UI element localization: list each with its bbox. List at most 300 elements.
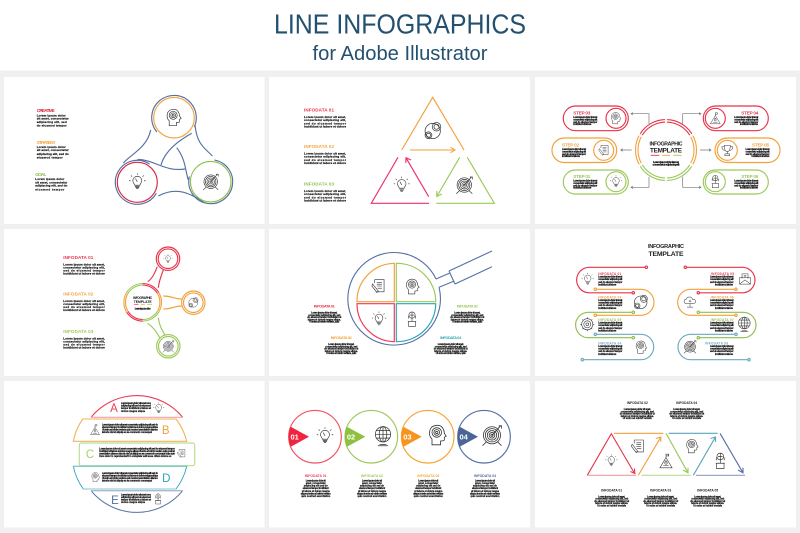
bottom text blocks: INFODATA 01	[601, 488, 622, 492]
slice C	[79, 443, 195, 466]
right text blocks	[705, 272, 734, 356]
left text blocks: Lorem ipsum dolor sit amet	[598, 299, 623, 302]
bottom text blocks: INFODATA 05	[697, 488, 718, 492]
panel: chained triangles	[535, 381, 796, 528]
text: infodata 02: INFODATA 02	[361, 474, 383, 478]
pill: step 02: sed do eiusmod tempor	[562, 153, 586, 156]
circle: green target	[190, 161, 231, 202]
text: infodata 01: ut labore et dolore magna	[302, 490, 330, 493]
text: infodata 02: Lorem ipsum dolor sit	[362, 480, 382, 482]
right text blocks: incididunt ut labore	[715, 353, 734, 356]
pill: step 01: sed do eiusmod tempor	[573, 184, 597, 187]
text block: infodata 04: do eiusmod tempor incididunt ut	[434, 348, 468, 351]
pill: step 04: sed do eiusmod tempor	[734, 121, 758, 124]
right text blocks: Lorem ipsum dolor sit amet	[710, 276, 734, 278]
slice E: adipiscing elit sed do eiusmod	[121, 496, 152, 499]
hub label: INFOGRAPHIC	[133, 296, 153, 300]
right text blocks: INFODATA 05	[711, 272, 734, 276]
top text blocks: INFODATA 04	[676, 401, 697, 405]
pill: step 01: Lorem ipsum dolor sit amet	[573, 180, 598, 182]
text: infodata 04: INFODATA 04	[474, 474, 496, 478]
top text blocks: INFODATA 02	[627, 401, 648, 405]
top text blocks: consectetur adipiscing elit, sed	[621, 410, 654, 413]
text block: infodata 01	[304, 108, 347, 128]
hub label	[133, 296, 153, 310]
text block: infodata 03: do eiusmod tempor incididunt ut	[450, 316, 485, 319]
left text blocks: Lorem ipsum dolor sit amet	[598, 276, 623, 278]
panel: hub and branches	[4, 229, 264, 376]
subtitle: for Adobe Illustrator	[312, 43, 488, 65]
left text blocks: sed do eiusmod tempor	[598, 350, 622, 353]
circle 01	[289, 410, 341, 463]
left text blocks: consectetur adipiscing elit	[598, 324, 623, 327]
pill: step 03	[563, 106, 628, 131]
right teal line	[678, 333, 750, 361]
text block: goal: eiusmod tempor	[35, 187, 65, 191]
text block: strategy: adipiscing elit, sed do	[37, 152, 69, 156]
text: infodata 04: Lorem ipsum dolor sit	[475, 480, 495, 482]
pill: step 03: STEP 03	[573, 110, 591, 116]
top text blocks: do eiusmod tempor incididunt ut	[669, 413, 704, 416]
text: infodata 04	[470, 474, 500, 498]
pill: step 02: STEP 02	[562, 142, 579, 148]
text block: infodata 03	[304, 182, 347, 202]
text: infodata 03: quis nostrud exercitation	[414, 495, 443, 498]
text block: strategy: Lorem ipsum dolor	[37, 145, 67, 149]
top text blocks: Ut enim ad minim veniam	[623, 417, 652, 420]
left red line	[577, 266, 648, 294]
center label: INFOGRAPHIC	[650, 141, 683, 147]
text block: goal: sit amet, consectetur	[35, 180, 68, 184]
bottom text blocks: labore et dolore magna aliqua.	[595, 502, 629, 505]
text block: infodata 04: consectetur adipiscing elit, sed	[435, 345, 467, 348]
pill: step 01: STEP 01	[573, 174, 591, 179]
text block: infodata 01	[307, 304, 342, 324]
icons	[605, 439, 725, 468]
left text blocks: incididunt ut labore	[598, 307, 617, 310]
text: infodata 02: quis nostrud exercitation	[358, 495, 387, 498]
pill: step 05: Lorem ipsum dolor sit amet	[746, 148, 770, 151]
text block: infodata 01: Ut enim ad minim veniam, quis	[309, 321, 340, 324]
teal chevron	[669, 433, 718, 475]
pill: step 03: consectetur adipiscing elit	[573, 118, 598, 121]
pill: step 05: consectetur adipiscing elit	[746, 150, 770, 153]
right text blocks: incididunt ut labore	[715, 330, 734, 332]
pill: step 01: consectetur adipiscing elit	[573, 182, 598, 185]
text block: strategy: sit amet, consectetur	[37, 148, 70, 152]
left text blocks: consectetur adipiscing elit	[598, 278, 623, 281]
text: infodata 04: ut labore et dolore magna	[471, 490, 500, 493]
text block: infodata 02: do eiusmod tempor incididunt ut	[324, 348, 359, 351]
right text blocks: consectetur adipiscing elit	[710, 324, 734, 327]
top text blocks: Lorem ipsum dolor sit amet,	[673, 408, 701, 411]
hub label: TEMPLATE	[134, 300, 152, 304]
blue chevron	[696, 433, 745, 475]
bottom text blocks: consectetur adipiscing elit, sed	[595, 498, 629, 501]
top text blocks	[620, 401, 704, 420]
text block: infodata 02: Lorem ipsum dolor sit amet,	[63, 299, 105, 303]
slice E: tempor incididunt ut labore et	[121, 498, 151, 502]
text block: creative: CREATIVE	[37, 108, 55, 113]
text block: infodata 01: INFODATA 01	[314, 304, 335, 308]
bottom text blocks	[594, 488, 725, 508]
text: infodata 03: ut labore et dolore magna	[414, 490, 443, 493]
quadrant: green head	[396, 263, 436, 302]
right text blocks: incididunt ut labore	[715, 307, 734, 310]
top text blocks: Lorem ipsum dolor sit amet,	[624, 408, 651, 411]
text block: infodata 03: Lorem ipsum dolor sit amet,	[304, 189, 346, 193]
top text blocks: do eiusmod tempor incididunt ut	[620, 413, 655, 416]
text block: infodata 03	[450, 304, 485, 324]
text: infodata 04: adipiscing elit sed do	[473, 485, 498, 488]
text block: goal: Lorem ipsum dolor	[35, 177, 65, 181]
circle 03	[401, 410, 454, 463]
circle 04	[458, 410, 510, 463]
slice D: Lorem ipsum dolor sit amet consectetur adipiscing elit sed do	[102, 472, 159, 475]
pill: step 04: Lorem ipsum dolor sit amet	[734, 116, 759, 119]
text: infodata 03: adipiscing elit sed do	[416, 485, 441, 488]
panel: serpentine lines	[535, 229, 796, 376]
center label: TEMPLATE	[650, 148, 683, 155]
heading: INFOGRAPHIC	[648, 244, 684, 250]
bottom text blocks: INFODATA 03	[650, 488, 671, 492]
pill: step 01: incididunt ut labore	[573, 187, 592, 190]
slice D: D	[162, 473, 170, 485]
text block: infodata 04: labore et dolore magna aliqua.	[434, 350, 468, 353]
text block: infodata 03: consectetur adipiscing elit, sed	[451, 314, 484, 317]
center label	[650, 141, 683, 166]
text block: infodata 02: INFODATA 02	[331, 336, 352, 340]
text block: creative	[37, 108, 70, 128]
header band	[0, 0, 800, 70]
text block: infodata 03: Lorem ipsum dolor sit amet,	[454, 312, 481, 314]
text: infodata 03: Lorem ipsum dolor sit	[418, 480, 439, 482]
bottom text blocks: consectetur adipiscing elit, sed	[644, 498, 678, 501]
right text blocks: Lorem ipsum dolor sit amet	[710, 322, 734, 324]
slice D: laboris nisi ut aliquip ex ea commodo consequat	[102, 480, 152, 482]
left teal line	[581, 333, 654, 361]
magnifier outline and handle	[348, 251, 492, 345]
pill: step 04: incididunt ut labore	[740, 123, 759, 126]
text block: infodata 02: sed do eiusmod tempor	[63, 305, 106, 309]
pill: step 03: Lorem ipsum dolor sit amet	[573, 116, 598, 119]
text: infodata 01: INFODATA 01	[305, 474, 327, 478]
text block: infodata 03: incididunt ut labore et dolore	[304, 198, 346, 202]
left orange line	[594, 288, 654, 316]
text: infodata 01: Lorem ipsum dolor sit	[306, 480, 326, 482]
text: infodata 03: amet, consectetur	[418, 482, 438, 485]
slice A: A	[110, 403, 118, 415]
pill: step 06: consectetur adipiscing elit	[734, 182, 759, 185]
heading: TEMPLATE	[648, 251, 684, 258]
slice E: Lorem ipsum dolor sit amet cons	[121, 494, 152, 496]
pill: step 04: STEP 04	[741, 110, 759, 116]
pill: step 01	[563, 170, 628, 194]
text block: infodata 04	[434, 336, 468, 355]
green chevron	[642, 433, 691, 475]
text: infodata 01: quis nostrud exercitation	[301, 495, 331, 498]
right text blocks: consectetur adipiscing elit	[710, 278, 734, 281]
text block: infodata 01: INFODATA 01	[63, 255, 94, 260]
text block: infodata 03: sed do eiusmod tempor	[63, 342, 106, 346]
text block: infodata 03: Lorem ipsum dolor sit amet,	[63, 336, 105, 340]
circle 04: 04	[460, 432, 469, 442]
slice C: incididunt ut labore et dolore magna aliqua Ut enim ad minim veniam quis nostrud	[99, 450, 175, 453]
text block: infodata 02: sed do eiusmod tempor	[304, 158, 347, 162]
circle: red bulb	[117, 162, 157, 202]
left text blocks: INFODATA 04	[598, 341, 622, 345]
text block: infodata 01: consectetur adipiscing elit, sed	[308, 314, 341, 317]
circle 03: 03	[403, 432, 412, 442]
text block: infodata 03: incididunt ut labore et dolore	[63, 345, 105, 349]
bottom text blocks: consectetur adipiscing elit, sed	[691, 498, 725, 501]
text block: infodata 02: consectetur adipiscing elit,	[304, 155, 346, 159]
pill: step 02	[552, 138, 617, 162]
pill: step 04	[703, 106, 768, 131]
bottom text blocks: do eiusmod tempor incididunt ut	[690, 500, 725, 503]
hub label: Lorem ipsum dolor	[135, 308, 151, 310]
slice A: dolore magna aliqua	[121, 410, 146, 413]
right text blocks: consectetur adipiscing elit	[710, 301, 734, 304]
text block: infodata 02: consectetur adipiscing elit, sed	[325, 345, 358, 348]
slice B	[73, 419, 187, 441]
text: infodata 01	[301, 474, 331, 498]
text: infodata 02: adipiscing elit sed do	[360, 485, 385, 488]
pill: step 06: STEP 06	[741, 174, 759, 179]
pill: step 05: incididunt ut labore	[752, 155, 770, 158]
text block: infodata 03: sed do eiusmod tempor	[304, 195, 347, 199]
text block: infodata 03: INFODATA 03	[304, 182, 334, 187]
text: infodata 04: quis nostrud exercitation	[470, 495, 500, 498]
left green line	[576, 311, 634, 339]
branch: orange	[163, 291, 205, 314]
center ring	[624, 108, 708, 192]
text block: infodata 03: INFODATA 03	[63, 329, 94, 334]
left text blocks: INFODATA 05	[598, 318, 622, 322]
slice D: eiusmod tempor incididunt ut labore et dolore magna aliqua	[102, 474, 159, 478]
text block: infodata 02: consectetur adipiscing elit,	[63, 302, 105, 306]
slice A	[91, 396, 183, 417]
right text blocks: consectetur adipiscing elit	[710, 347, 734, 350]
text block: goal: adipiscing elit, sed do	[35, 184, 67, 188]
text: infodata 04: amet, consectetur	[475, 482, 495, 485]
text: infodata 04: eiusmod tempor incididunt	[472, 487, 498, 490]
pill: step 04: consectetur adipiscing elit	[734, 118, 759, 121]
slice C: Lorem ipsum dolor sit amet consectetur adipiscing elit sed do eiusmod tempor	[99, 448, 175, 450]
slice C: irure dolor in reprehenderit in voluptate velit esse cillum dolore eu	[99, 455, 172, 458]
pill: step 06	[703, 170, 768, 194]
text block: infodata 01: Lorem ipsum dolor sit amet,	[304, 115, 346, 119]
right text blocks: sed do eiusmod tempor	[710, 327, 734, 330]
slice C: C	[86, 449, 94, 461]
text block: infodata 01: labore et dolore magna aliqua.	[308, 318, 341, 321]
text block: infodata 01	[63, 255, 106, 275]
left text blocks: Lorem ipsum dolor sit amet	[598, 322, 623, 324]
text: infodata 02: eiusmod tempor incididunt	[359, 487, 385, 490]
slice B: eiusmod tempor incididunt ut labore et dolore magna aliqua	[102, 426, 159, 429]
text: infodata 01: amet, consectetur	[306, 482, 326, 485]
text block: infodata 04: Lorem ipsum dolor sit amet,	[438, 343, 464, 346]
left text blocks: consectetur adipiscing elit	[598, 347, 623, 350]
text block: infodata 02: incididunt ut labore et dolore	[63, 308, 105, 312]
text: infodata 02: amet, consectetur	[362, 482, 382, 485]
text block: infodata 01: incididunt ut labore et dolore	[304, 124, 346, 128]
slice B: laboris nisi ut aliquip ex ea commodo consequat	[102, 431, 152, 434]
panel: magnifier	[269, 229, 530, 376]
slice E: dolore magna aliqua	[121, 501, 146, 504]
center label: consectetur adipiscing elit	[652, 162, 680, 166]
text block: infodata 03: labore et dolore magna aliqua.	[451, 318, 484, 321]
text block: infodata 02: INFODATA 02	[304, 144, 334, 149]
text block: creative: adipiscing elit, sed	[37, 120, 67, 124]
text: infodata 01: adipiscing elit sed do	[304, 485, 328, 488]
left text blocks: incididunt ut labore	[598, 284, 617, 286]
left text blocks	[598, 272, 623, 356]
heading	[648, 244, 684, 258]
slice A: tempor incididunt ut labore et	[121, 407, 151, 410]
text block: infodata 02	[324, 336, 359, 355]
slice B: B	[162, 425, 170, 437]
pill: step 02: incididunt ut labore	[562, 155, 581, 158]
circle 02	[345, 410, 398, 463]
icons	[580, 273, 750, 353]
text block: infodata 01: INFODATA 01	[304, 108, 334, 112]
orange triangle with arrow	[402, 97, 464, 153]
panel: sliced circle	[4, 381, 264, 528]
bottom text blocks: Ut enim ad minim veniam	[646, 504, 675, 508]
text block: infodata 03: INFODATA 03	[457, 304, 478, 308]
panel: three linked circles	[4, 77, 264, 224]
bottom text blocks: Lorem ipsum dolor sit amet,	[647, 495, 675, 498]
text block: infodata 02	[63, 292, 106, 312]
right text blocks: incididunt ut labore	[715, 284, 734, 286]
text block: infodata 03: consectetur adipiscing elit,	[63, 339, 105, 343]
pill: step 06: incididunt ut labore	[740, 187, 759, 190]
pill: step 05: sed do eiusmod tempor	[746, 153, 770, 156]
panel: triangle arrows	[269, 77, 530, 224]
text: infodata 03: INFODATA 03	[417, 474, 439, 478]
bottom text blocks: Lorem ipsum dolor sit amet,	[694, 495, 722, 498]
text: infodata 02: aliqua ut enim ad minim veniam	[357, 492, 387, 495]
text: infodata 03: eiusmod tempor incididunt	[415, 487, 442, 490]
left text blocks: incididunt ut labore	[598, 330, 617, 332]
icon: coins	[425, 122, 441, 139]
connector arrows	[621, 112, 711, 189]
text block: goal: GOAL	[35, 172, 46, 177]
panel: step pills	[535, 77, 796, 224]
icon: target	[456, 177, 472, 194]
left text blocks: sed do eiusmod tempor	[598, 281, 622, 284]
red triangle	[587, 434, 636, 475]
text block: infodata 01: consectetur adipiscing elit,	[304, 118, 346, 122]
bottom text blocks: labore et dolore magna aliqua.	[691, 502, 725, 505]
hub ring	[117, 277, 168, 328]
text block: infodata 01: Lorem ipsum dolor sit amet,	[63, 262, 105, 266]
text block: infodata 01: do eiusmod tempor incididunt ut	[307, 316, 342, 319]
title: LINE INFOGRAPHICS	[274, 8, 526, 40]
slice D: Ut enim ad minim veniam quis nostrud exercitation ullamco	[102, 477, 159, 480]
left text blocks: INFODATA 01	[598, 272, 622, 276]
quadrant: teal plant	[396, 304, 436, 342]
text block: creative: sit amet, consectetur	[37, 117, 70, 121]
text block: infodata 02	[304, 144, 347, 165]
left text blocks: incididunt ut labore	[598, 353, 617, 356]
pill: step 06: sed do eiusmod tempor	[734, 184, 758, 187]
right text blocks: INFODATA 07	[711, 318, 734, 322]
bottom text blocks: do eiusmod tempor incididunt ut	[643, 500, 678, 503]
slice A: adipiscing elit sed do eiusmod	[121, 405, 152, 408]
text block: infodata 03: consectetur adipiscing elit,	[304, 192, 346, 196]
green triangle with arrow	[436, 157, 494, 203]
right orange line	[678, 288, 737, 316]
text block: goal	[35, 172, 68, 191]
text block: infodata 04: Ut enim ad minim veniam, quis	[436, 352, 466, 355]
blue linking curves	[107, 86, 236, 212]
text block: infodata 03	[63, 329, 106, 349]
text block: creative: do eiusmod tempor	[37, 124, 68, 128]
slice B: Ut enim ad minim veniam quis nostrud exercitation ullamco	[102, 428, 159, 432]
text block: infodata 02: Lorem ipsum dolor sit amet,	[304, 152, 346, 156]
pill: step 02: consectetur adipiscing elit	[562, 150, 586, 153]
right text blocks: sed do eiusmod tempor	[710, 304, 734, 307]
slice E	[91, 491, 183, 512]
pill: step 02: Lorem ipsum dolor sit amet	[562, 148, 586, 151]
branch: red	[148, 247, 180, 288]
text block: strategy: eiusmod tempor	[37, 156, 64, 160]
right green line	[697, 311, 756, 339]
left text blocks: consectetur adipiscing elit	[598, 301, 623, 304]
text block: strategy: STRATEGY	[37, 140, 56, 145]
circle 02: 02	[347, 432, 355, 442]
pill: step 03: sed do eiusmod tempor	[573, 121, 597, 124]
quadrant: orange doc	[357, 263, 394, 302]
left text blocks: Lorem ipsum dolor sit amet	[598, 345, 623, 348]
text block: infodata 01: incididunt ut labore et dolore	[63, 271, 105, 275]
text block: creative: Lorem ipsum dolor	[37, 114, 67, 118]
left text blocks: INFODATA 03	[598, 295, 622, 299]
text block: infodata 03: Ut enim ad minim veniam, quis	[452, 321, 483, 324]
right text blocks: INFODATA 06	[711, 295, 734, 299]
top text blocks: Ut enim ad minim veniam	[672, 417, 701, 420]
circle 01: 01	[291, 432, 299, 442]
left text blocks: sed do eiusmod tempor	[598, 327, 622, 330]
bottom text blocks: labore et dolore magna aliqua.	[644, 502, 678, 505]
slice D	[73, 466, 187, 489]
pill: step 05	[715, 138, 780, 162]
text block: infodata 02: incididunt ut labore et dolore	[304, 161, 346, 165]
slice E: E	[111, 495, 119, 507]
right text blocks: Lorem ipsum dolor sit amet	[710, 345, 734, 348]
right text blocks: sed do eiusmod tempor	[710, 350, 734, 353]
text block: infodata 04: INFODATA 04	[440, 336, 462, 340]
right text blocks: Lorem ipsum dolor sit amet	[710, 299, 734, 302]
pill: step 03: incididunt ut labore	[573, 123, 592, 126]
icon: bulb	[394, 177, 410, 191]
bottom text blocks: do eiusmod tempor incididunt ut	[594, 500, 629, 503]
right text blocks: INFODATA 08	[705, 341, 728, 345]
text: infodata 04: aliqua ut enim ad minim veniam	[470, 492, 500, 495]
text block: infodata 02: INFODATA 02	[63, 292, 94, 296]
slice B: Lorem ipsum dolor sit amet consectetur adipiscing elit sed do	[102, 424, 159, 426]
right red line	[684, 266, 755, 294]
bottom text blocks: Ut enim ad minim veniam	[693, 504, 722, 508]
text block: infodata 02: Ut enim ad minim veniam, quis	[326, 352, 357, 355]
quadrant: red bulb	[357, 304, 394, 342]
panel: four numbered circles	[269, 381, 530, 528]
top text blocks: labore et dolore magna aliqua.	[621, 415, 654, 418]
pill: step 05: STEP 05	[752, 142, 769, 148]
branch: green	[148, 318, 180, 358]
